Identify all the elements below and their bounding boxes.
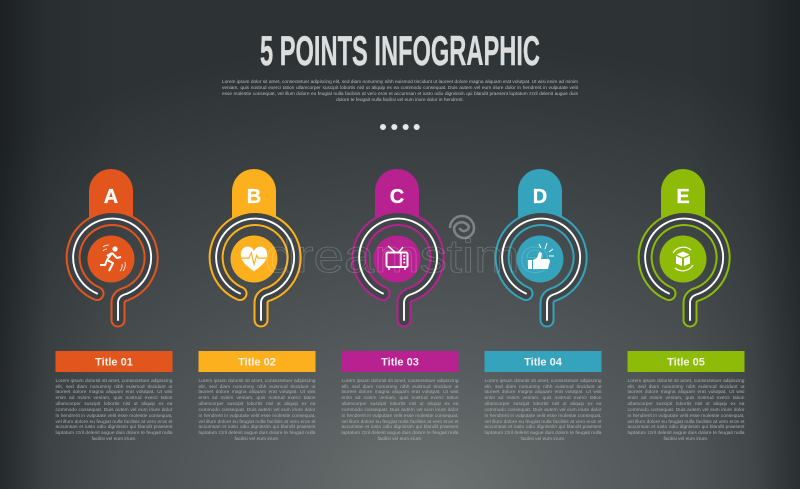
disc E [660,236,706,282]
icon: runner [100,245,125,271]
disc C [374,236,420,282]
intro text: Lorem ipsum dolor sit amet, consectetuer adipiscing elit, sed diam nonummy nibh euismod tincidunt ut laoreet dolore magna aliquam erat volutpat. Ut wisi enim ad minim veniam, quis nostrud exerci tation ullamcorper suscipit lobortis nisl ut aliquip ex ea commodo consequat. Duis autem vel eum iriure dolor in hendrerit in vulputate velit esse molestie consequat, vel illum dolore eu feugiat nulla facilisis at vero eros et accumsan et iusto odio dignissim qui blandit praesent luptatum zzril delenit augue duis dolore te feugait nulla facilisi vel eum iriure dolor in hendrerit. [222,80,578,103]
title bar 03 [342,351,458,372]
body text 01: Lorem ipsum dolorsit sit amet, consectetuer adipiscing elit, sed diam nonummy nibh euismod tincidunt ut laoreet dolore magna aliquam erat volutpat. Ut wisi enim ad minim veniam, quis nostrud exerci tation ullamcorper suscipit lobortis nisl ut aliquip ex ea commodo consequat. Duis autem vel eum iriure dolor in hendrerit in vulputate velit esse molestie consequat, vel illum dolore eu feugiat nulla facilisis at vero eros et accumsan et iusto odio dignissim qui blandit praesent luptatum zzril delenit augue duis dolore te feugait nulla facilisi vel eum iriure. [56,379,172,442]
letter A: A [104,186,118,208]
icon: thumbs up [528,243,554,269]
disc B [230,236,278,282]
tab B [232,169,276,224]
title bar 04 [484,351,602,372]
ring C [359,219,437,320]
ring B [216,219,294,320]
watermark [265,216,550,282]
title bar 01: Title 01 [95,356,133,368]
title bar 04: Title 04 [524,356,563,368]
tab A [89,169,133,224]
letter C: C [390,186,404,208]
point E [645,169,723,320]
icon: heart with pulse [241,247,267,271]
title bar 05 [628,351,744,372]
tab E [661,169,705,224]
letter E: E [676,186,690,208]
body text 02: Lorem ipsum dolorsit sit amet, consectetuer adipiscing elit, sed diam nonummy nibh euismod tincidunt ut laoreet dolore magna aliquam erat volutpat. Ut wisi enim ad minim veniam, quis nostrud exerci tation ullamcorper suscipit lobortis nisl ut aliquip ex ea commodo consequat. Duis autem vel eum iriure dolor in hendrerit in vulputate velit esse molestie consequat, vel illum dolore eu feugiat nulla facilisis at vero eros et accumsan et iusto odio dignissim qui blandit praesent luptatum zzril delenit augue duis dolore te feugait nulla facilisi vel eum iriure. [198,379,316,442]
tab C [375,169,419,224]
ring D [502,219,580,320]
body text 04: Lorem ipsum dolorsit sit amet, consectetuer adipiscing elit, sed diam nonummy nibh euismod tincidunt ut laoreet dolore magna aliquam erat volutpat. Ut wisi enim ad minim veniam, quis nostrud exerci tation ullamcorper suscipit lobortis nisl ut aliquip ex ea commodo consequat. Duis autem vel eum iriure dolor in hendrerit in vulputate velit esse molestie consequat, vel illum dolore eu feugiat nulla facilisis at vero eros et accumsan et iusto odio dignissim qui blandit praesent luptatum zzril delenit augue duis dolore te feugait nulla facilisi vel eum iriure. [484,379,602,442]
point A [73,169,151,320]
watermark: dreamstime [265,230,550,282]
body text 03: Lorem ipsum dolorsit sit amet, consectetuer adipiscing elit, sed diam nonummy nibh euismod tincidunt ut laoreet dolore magna aliquam erat volutpat. Ut wisi enim ad minim veniam, quis nostrud exerci tation ullamcorper suscipit lobortis nisl ut aliquip ex ea commodo consequat. Duis autem vel eum iriure dolor in hendrerit in vulputate velit esse molestie consequat, vel illum dolore eu feugiat nulla facilisis at vero eros et accumsan et iusto odio dignissim qui blandit praesent luptatum zzril delenit augue duis dolore te feugait nulla facilisi vel eum iriure. [342,379,458,442]
icon: television [386,246,408,270]
title bar 02: Title 02 [238,356,276,368]
icon: cube with cycle arrows [673,247,693,271]
tab D [518,169,562,224]
ring E [645,219,723,320]
title bar 03: Title 03 [381,356,419,368]
title bar 01 [56,351,172,372]
title: 5 POINTS INFOGRAPHIC [260,27,540,74]
point C [359,169,437,320]
title bar 05: Title 05 [667,356,705,368]
letter D: D [533,186,547,208]
letter B: B [247,186,261,208]
point D [502,169,580,320]
disc A [88,236,134,282]
disc D [516,236,564,282]
body text 05: Lorem ipsum dolorsit sit amet, consectetuer adipiscing elit, sed diam nonummy nibh euismod tincidunt ut laoreet dolore magna aliquam erat volutpat. Ut wisi enim ad minim veniam, quis nostrud exerci tation ullamcorper suscipit lobortis nisl ut aliquip ex ea commodo consequat. Duis autem vel eum iriure dolor in hendrerit in vulputate velit esse molestie consequat, vel illum dolore eu feugiat nulla facilisis at vero eros et accumsan et iusto odio dignissim qui blandit praesent luptatum zzril delenit augue duis dolore te feugait nulla facilisi vel eum iriure. [628,379,744,442]
pagination dots [380,124,420,130]
title bar 02 [198,351,316,372]
point B [216,169,294,320]
ring A [73,219,151,320]
